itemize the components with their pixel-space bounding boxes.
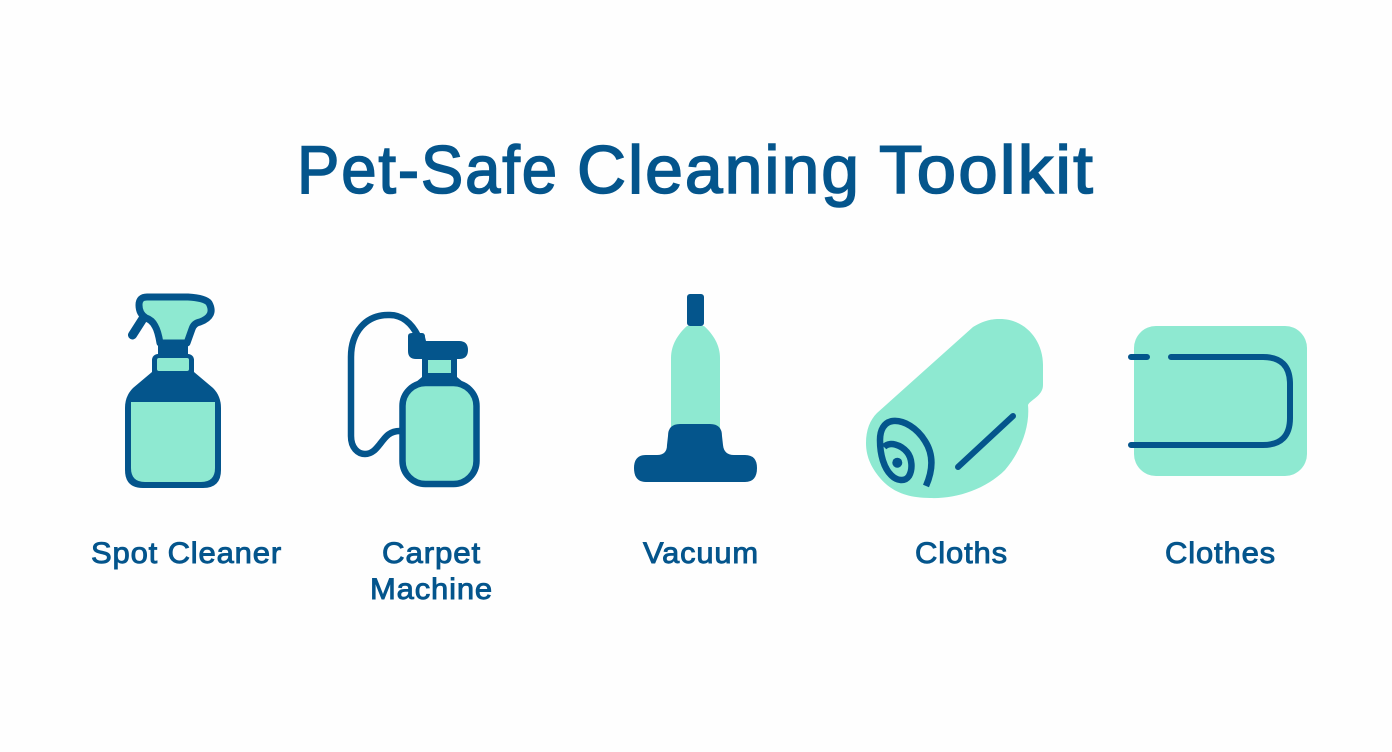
title: Pet-Safe <box>297 132 559 208</box>
label: vacuum: Vacuum <box>643 537 759 570</box>
title: Cleaning <box>577 132 861 208</box>
icon: folded clothes <box>1131 326 1307 476</box>
label: clothes: Clothes <box>1165 537 1276 570</box>
label: carpet machine <box>370 537 493 606</box>
label: carpet machine: Machine <box>370 573 493 606</box>
title: Toolkit <box>879 132 1095 208</box>
label: spot cleaner: Spot Cleaner <box>91 537 282 570</box>
icon: carpet machine <box>351 315 476 484</box>
label: cloths: Cloths <box>915 537 1008 570</box>
icon: spray bottle <box>125 297 221 488</box>
icon: vacuum <box>634 294 757 482</box>
label: carpet machine: Carpet <box>382 537 481 570</box>
icon: rolled cloth <box>866 319 1043 498</box>
